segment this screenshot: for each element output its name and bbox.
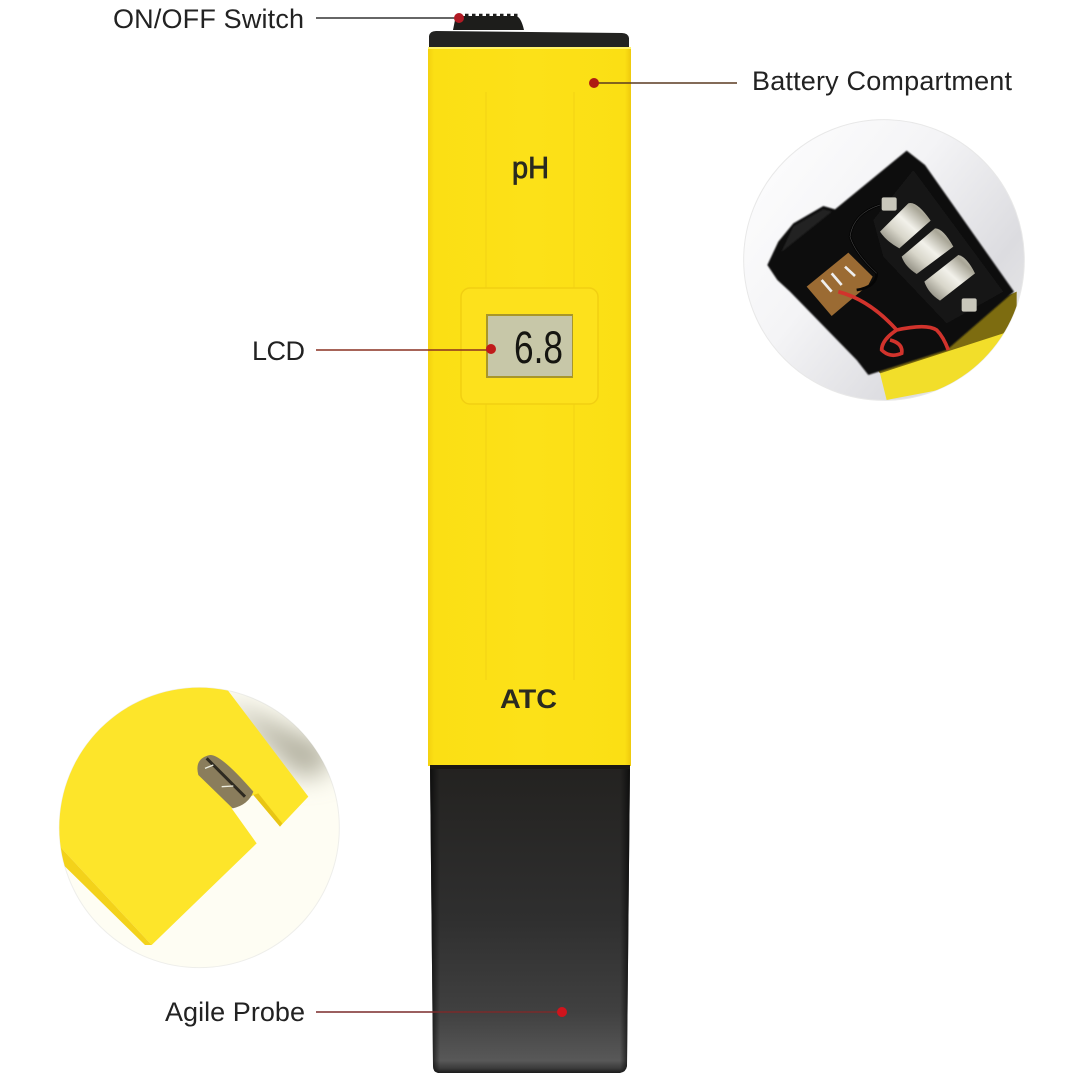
inset: temperature probe [50, 680, 339, 968]
shadow [223, 700, 330, 777]
callout: Battery Compartment [589, 66, 1012, 96]
callout: ON/OFF Switch [113, 4, 464, 34]
LCD screen [486, 314, 573, 378]
LCD reading: 6.8 [514, 322, 563, 373]
centre strip [486, 92, 574, 680]
pH meter device [428, 16, 631, 1073]
ATC label: ATC [500, 684, 557, 714]
callout: ON/OFF Switch: ON/OFF Switch [113, 4, 304, 34]
callout: Battery Compartment: Battery Compartment [752, 66, 1012, 96]
callout: LCD [252, 336, 496, 366]
yellow body [428, 47, 631, 766]
black wire [850, 205, 880, 290]
battery contacts [880, 197, 977, 312]
red wire [838, 292, 948, 355]
LCD frame [461, 288, 598, 404]
top cap [429, 31, 629, 47]
metal sensor [197, 755, 253, 808]
power knob [453, 16, 524, 30]
yellow body corner [880, 330, 1007, 400]
black probe cover [430, 765, 630, 1073]
callout: Agile Probe: Agile Probe [165, 997, 305, 1027]
yellow tip [50, 680, 308, 945]
battery holder [767, 151, 1014, 375]
circuit board [807, 253, 873, 316]
pH label: pH [512, 150, 549, 185]
inset: battery compartment [744, 120, 1024, 400]
callout: Agile Probe [165, 997, 567, 1027]
callout: LCD: LCD [252, 336, 305, 366]
